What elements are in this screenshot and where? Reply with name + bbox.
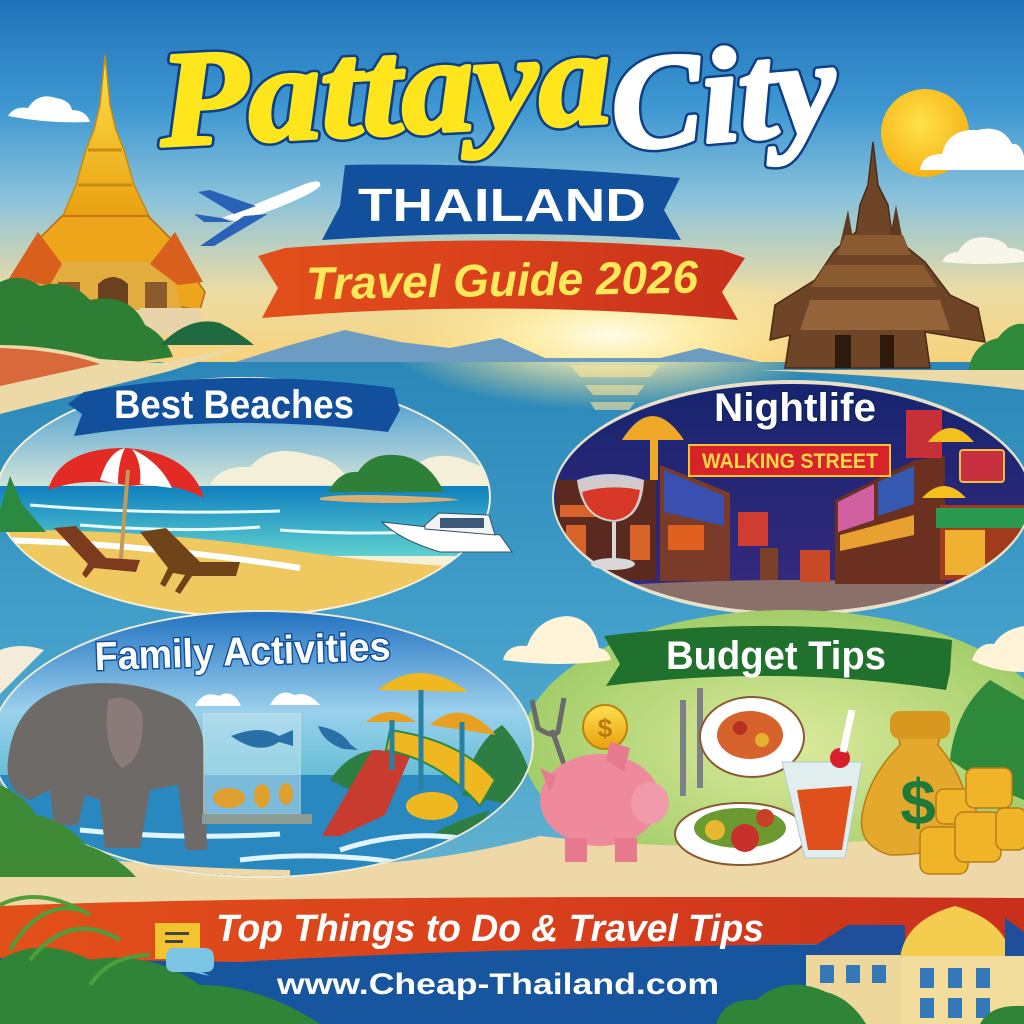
sign: Walking Street bbox=[689, 445, 890, 476]
banner: Thailand bbox=[322, 165, 681, 240]
temple: golden pagoda bbox=[8, 55, 205, 334]
panel: nightlife bbox=[550, 378, 1024, 620]
tagline: Top Things to Do & Travel Tips bbox=[216, 908, 764, 950]
shoreline right bbox=[760, 370, 1024, 390]
icon: lantern left bbox=[622, 416, 684, 480]
hotel building bbox=[800, 906, 1024, 1024]
panel: budget tips contents bbox=[532, 626, 1024, 874]
bottom blue strip bbox=[0, 945, 1024, 1024]
jungle foliage bottom left bbox=[0, 897, 320, 1024]
icon: sun bbox=[881, 89, 969, 177]
banner: Travel Guide 2026: Travel Guide 2026 bbox=[306, 251, 699, 309]
panel: family activities bbox=[0, 608, 540, 880]
icon: water slide bbox=[322, 673, 496, 836]
title: Pattaya City: Pattaya bbox=[154, 2, 615, 176]
green hill left bbox=[0, 278, 173, 365]
icon: piggy bank bbox=[540, 742, 669, 862]
website url: www.Cheap-Thailand.com bbox=[276, 968, 719, 1001]
cloud between panels bbox=[503, 616, 611, 664]
icon: aquarium tank bbox=[202, 714, 358, 824]
sign: small billboard bbox=[960, 450, 1004, 482]
icon: beach chairs bbox=[54, 526, 240, 594]
cloud right bbox=[942, 237, 1024, 264]
bushes bottom right bbox=[716, 985, 1024, 1024]
beach shoreline left bbox=[0, 345, 250, 414]
title: Pattaya City: City bbox=[605, 12, 842, 179]
icon: cocktail glass bbox=[577, 474, 644, 570]
bush left bbox=[0, 785, 136, 877]
icon: plate top bbox=[700, 697, 804, 777]
cloud right edge bbox=[972, 626, 1024, 672]
icon: beach umbrella bbox=[48, 448, 204, 570]
panel background: budget tips bbox=[522, 610, 1024, 880]
island trees bbox=[328, 455, 444, 492]
sand strip bbox=[0, 832, 1024, 912]
icon: airplane bbox=[194, 181, 320, 246]
island bbox=[320, 495, 460, 503]
heading: Best Beaches: Best Beaches bbox=[114, 383, 354, 427]
cloud left edge bbox=[0, 646, 44, 694]
banner: Budget Tips bbox=[604, 626, 952, 690]
icon: chat bubbles bbox=[155, 923, 214, 976]
sign: Walking Street: WALKING STREET bbox=[702, 450, 878, 473]
title: Pattaya City: Pattaya bbox=[154, 2, 615, 176]
sign: red hanging bbox=[906, 410, 942, 458]
distant mountains bbox=[235, 330, 760, 362]
icon: elephant bbox=[7, 683, 207, 850]
icon: coin: $ bbox=[598, 713, 613, 743]
heading: Budget Tips: Budget Tips bbox=[666, 634, 886, 678]
icon: plate bottom bbox=[675, 803, 807, 865]
bottom red banner bbox=[0, 897, 1024, 962]
icon: coin bbox=[583, 705, 627, 749]
plant left bbox=[0, 476, 46, 532]
icon: money bag bbox=[862, 711, 967, 855]
title: Pattaya City: City bbox=[605, 12, 842, 179]
banner: Thailand: THAILAND bbox=[358, 179, 646, 231]
icon: money bag: $ bbox=[900, 766, 936, 838]
plant right bbox=[950, 680, 1024, 800]
icon: fork and knife bbox=[683, 688, 700, 796]
icon: juice drink bbox=[782, 710, 862, 858]
icon: speedboat bbox=[382, 513, 512, 552]
wooden temple bbox=[770, 142, 985, 368]
cloud top right bbox=[920, 129, 1024, 170]
title: Pattaya City bbox=[154, 2, 842, 179]
banner: Best Beaches bbox=[68, 378, 400, 436]
icon: coin stacks bbox=[920, 768, 1024, 874]
green bush right bbox=[968, 324, 1024, 372]
sea background bbox=[0, 362, 1024, 882]
sun glow on horizon bbox=[380, 260, 840, 410]
sun reflection on sea bbox=[570, 365, 660, 410]
banner: Travel Guide 2026 bbox=[258, 240, 745, 320]
heading: Nightlife: Nightlife bbox=[714, 386, 876, 430]
icon: lanterns right bbox=[922, 428, 974, 498]
sky background bbox=[0, 0, 1024, 365]
icon: cutlery bbox=[532, 698, 566, 770]
panel: best beaches bbox=[0, 375, 512, 628]
heading: Family Activities: Family Activities bbox=[94, 625, 391, 679]
cloud top left bbox=[8, 96, 90, 122]
